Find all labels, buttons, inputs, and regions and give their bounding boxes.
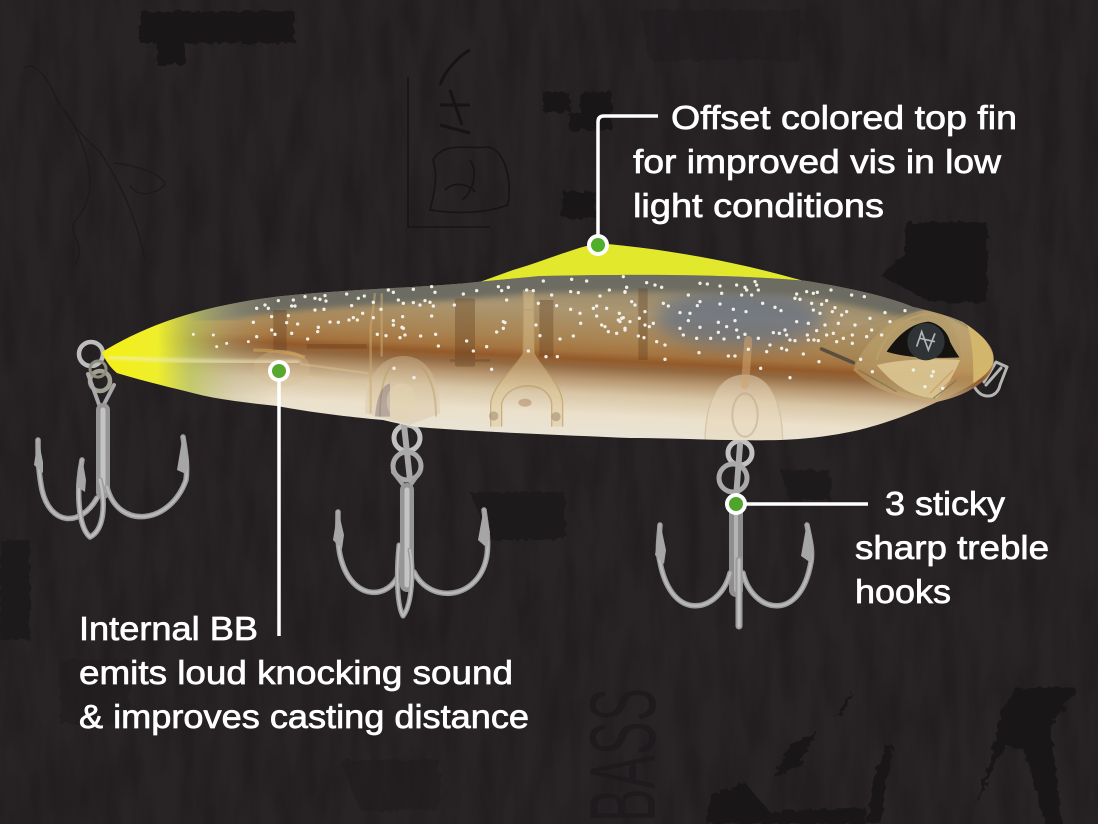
blue back patch	[655, 288, 825, 348]
hanger one	[365, 356, 440, 425]
callout: internal BB	[79, 360, 529, 735]
background sketch: cartoon print	[408, 50, 509, 227]
tail yellow fade	[102, 299, 262, 404]
callout: internal BB: & improves casting distance	[79, 698, 529, 735]
callout: top fin: light conditions	[633, 187, 884, 224]
nose eye ring	[973, 362, 1007, 396]
background sketch: fish	[24, 66, 165, 265]
callout: top fin: Offset colored top fin	[671, 99, 1017, 136]
callout: treble hooks: sharp treble	[855, 529, 1049, 566]
top fin	[477, 243, 807, 285]
background lettering: BASS	[570, 688, 675, 822]
glitter: mid body	[253, 277, 625, 378]
callout: internal BB: Internal BB	[79, 610, 258, 647]
barbs	[333, 507, 490, 549]
internal structure: crop-1 coordinates	[253, 290, 563, 427]
glitter: tail	[193, 334, 248, 347]
hanger two	[491, 290, 563, 427]
barbs	[655, 522, 813, 564]
head cap	[853, 310, 993, 402]
eye	[887, 322, 959, 358]
callout: treble hooks	[725, 485, 1049, 610]
hook: rear treble	[34, 342, 189, 537]
internal structure: crop-2 coordinates	[638, 288, 994, 443]
hook: front treble	[655, 441, 813, 626]
grey dorsal band	[190, 276, 923, 313]
callout: top fin	[587, 99, 1017, 256]
callout: internal BB: emits loud knocking sound	[79, 654, 513, 691]
glitter: front body	[622, 282, 943, 388]
barbs	[34, 434, 189, 492]
BB chamber	[253, 350, 310, 387]
lure body	[100, 275, 994, 450]
callout: top fin: for improved vis in low	[633, 143, 1001, 180]
callout: treble hooks: 3 sticky	[885, 485, 1006, 522]
callout: treble hooks: hooks	[855, 573, 951, 610]
hook: middle treble	[333, 425, 490, 616]
